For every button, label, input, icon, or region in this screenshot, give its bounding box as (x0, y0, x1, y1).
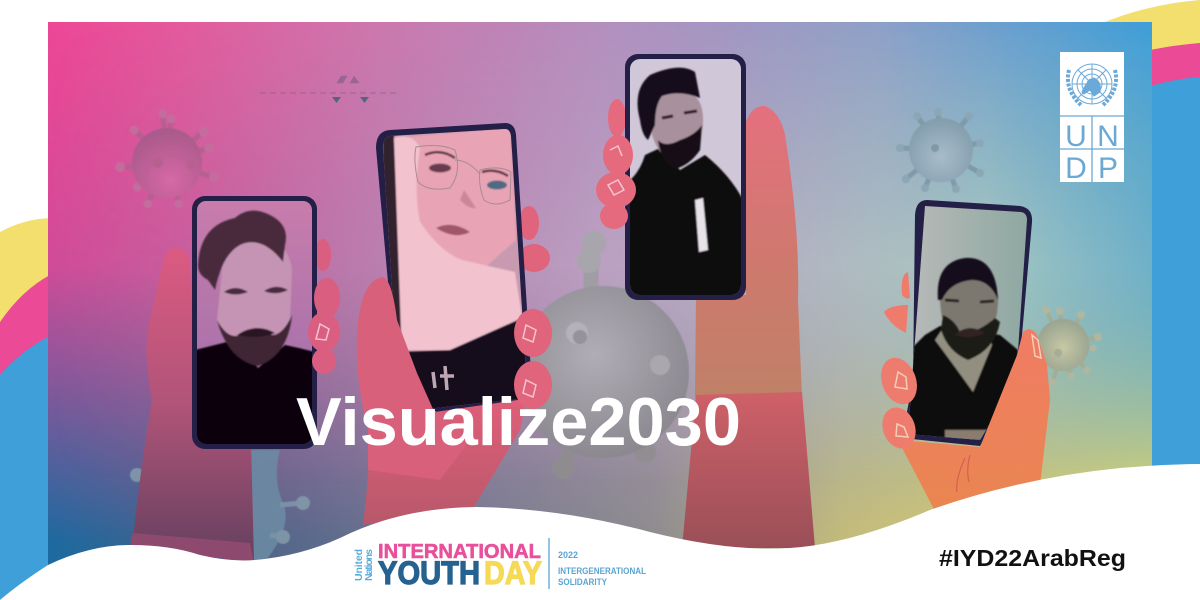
hand 4 palm and thumb (875, 329, 1050, 515)
left colour waves (0, 218, 50, 600)
hand 2 thumb (357, 277, 470, 480)
phone 4 with speaker (900, 200, 1032, 450)
International Youth Day logo (353, 538, 646, 591)
UNDP logo: N (1097, 120, 1119, 153)
icon: virus centre large (517, 231, 689, 479)
UNDP logo (1060, 52, 1124, 185)
phone 1 with speaker (192, 196, 317, 449)
icon: UN emblem (1068, 64, 1116, 106)
right colour waves (1105, 0, 1200, 480)
icon: virus top right (896, 108, 984, 193)
International Youth Day logo: INTERNATIONAL (378, 540, 541, 563)
UNDP logo: P (1098, 152, 1118, 185)
International Youth Day logo: SOLIDARITY (558, 577, 607, 587)
UNDP logo: D (1065, 152, 1087, 185)
hand 2 base with upper fingers (363, 206, 550, 525)
icon: virus top left (115, 110, 219, 208)
hand 4 small fingers (884, 272, 910, 333)
hand 1 fingers (308, 278, 340, 374)
icon: virus right small (1037, 306, 1102, 386)
hand 2 lower fingers (514, 309, 552, 409)
hand 3 fingers (596, 135, 636, 229)
hand 1 with sleeve (130, 239, 331, 562)
white wave footer (0, 464, 1200, 600)
International Youth Day logo: INTERGENERATIONAL (558, 566, 646, 576)
icon: virus bottom left (130, 450, 310, 565)
International Youth Day logo: YOUTH (378, 555, 480, 591)
International Youth Day logo: DAY (484, 555, 542, 591)
top decorative mark (260, 76, 396, 103)
International Youth Day logo: 2022 (558, 550, 578, 560)
hand 3 with sleeve (608, 99, 815, 548)
International Youth Day logo: Nations (363, 549, 375, 581)
International Youth Day logo: United (353, 549, 365, 581)
phone 2 with speaker (376, 123, 531, 420)
UNDP logo: U (1065, 120, 1087, 153)
hashtag: #IYD22ArabReg (939, 545, 1126, 571)
main title: Visualize2030 (296, 384, 741, 460)
phone 3 with speaker (625, 54, 746, 300)
